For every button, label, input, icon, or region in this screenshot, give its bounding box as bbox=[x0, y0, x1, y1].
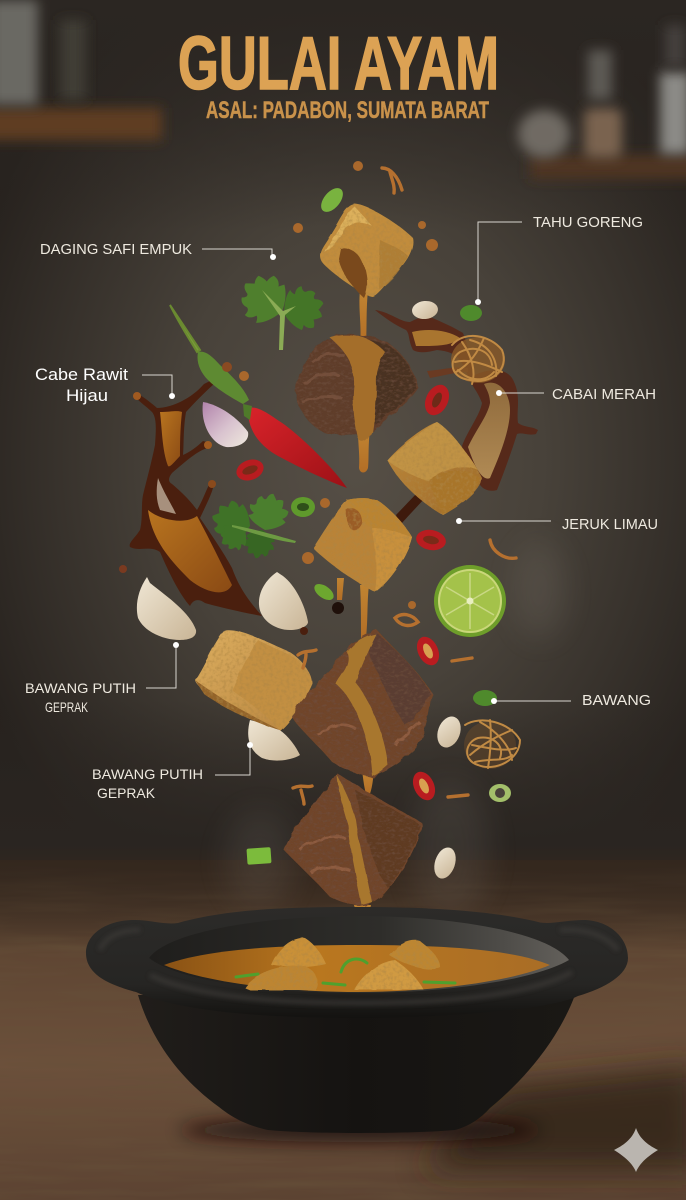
background: blurred shelves and jars bbox=[0, 0, 686, 179]
cilantro lower bbox=[208, 490, 296, 561]
sauce splash right bbox=[375, 310, 538, 525]
label: Cabe Rawit Hijau bbox=[35, 366, 175, 405]
subtitle: origin: ASAL: PADABON, SUMATA BARAT bbox=[206, 97, 489, 124]
sauce splash left bbox=[119, 380, 262, 616]
bowl body bbox=[138, 995, 575, 1133]
fried shallots bbox=[293, 168, 520, 804]
label: Cabe Rawit Hijau: Hijau bbox=[66, 387, 108, 405]
label: Jeruk Limau: JERUK LIMAU bbox=[562, 517, 658, 533]
green chili bbox=[170, 305, 249, 404]
shallot bbox=[203, 402, 248, 447]
label: Bawang: BAWANG bbox=[582, 693, 651, 709]
label: Bawang Putih Geprak lower: GEPRAK bbox=[97, 785, 156, 801]
label: Tahu Goreng: TAHU GORENG bbox=[533, 215, 643, 231]
tofu cube 4 bbox=[195, 630, 312, 730]
chili slices bbox=[233, 381, 454, 804]
bowl rim bbox=[86, 907, 628, 1018]
garlic clove lower bbox=[248, 720, 300, 761]
label: Bawang Putih Geprak lower: BAWANG PUTIH bbox=[92, 766, 203, 782]
icon: sparkle star bbox=[614, 1128, 658, 1172]
garlic cloves bbox=[137, 300, 465, 881]
label: Bawang Putih Geprak lower bbox=[92, 742, 253, 801]
wooden table bbox=[0, 860, 686, 1200]
label: Bawang Putih Geprak left: BAWANG PUTIH bbox=[25, 680, 136, 696]
title bbox=[178, 21, 499, 124]
tofu cube 2 bbox=[387, 422, 482, 515]
label: Tahu Goreng bbox=[475, 215, 643, 305]
label: Daging Safi Empuk bbox=[40, 242, 276, 260]
label: Cabe Rawit Hijau: Cabe Rawit bbox=[35, 366, 128, 384]
sauce drip column bbox=[337, 290, 374, 926]
tofu cube 3 bbox=[313, 498, 412, 592]
label: Bawang bbox=[491, 693, 651, 709]
label: Cabai Merah bbox=[496, 387, 656, 403]
green onion in curry bbox=[236, 959, 455, 985]
heading: Gulai Ayam: GULAI AYAM bbox=[178, 21, 499, 105]
label: Jeruk Limau bbox=[456, 517, 658, 533]
beef chunk 1 bbox=[295, 334, 418, 442]
background: kitchen wall bbox=[0, 0, 686, 880]
tofu cube 1 bbox=[320, 204, 414, 298]
rim highlights bbox=[100, 930, 618, 1003]
green onion pieces bbox=[246, 184, 511, 865]
label: Bawang Putih Geprak left bbox=[25, 642, 179, 715]
label: Bawang Putih Geprak left: GEPRAK bbox=[45, 699, 88, 715]
red chili bbox=[243, 404, 347, 488]
clay bowl bbox=[86, 907, 628, 1133]
label: Daging Safi Empuk: DAGING SAFI EMPUK bbox=[40, 242, 192, 258]
small crumbs bbox=[222, 161, 438, 635]
tofu in curry bbox=[245, 938, 440, 990]
bowl inner wall bbox=[149, 916, 569, 993]
beef chunk 3 bbox=[284, 773, 422, 905]
lime slice bbox=[434, 565, 506, 637]
label: Cabai Merah: CABAI MERAH bbox=[552, 387, 656, 403]
cilantro upper bbox=[230, 265, 330, 350]
beef chunk 2 bbox=[292, 630, 432, 777]
steam bbox=[225, 540, 566, 920]
curry surface bbox=[164, 945, 550, 992]
